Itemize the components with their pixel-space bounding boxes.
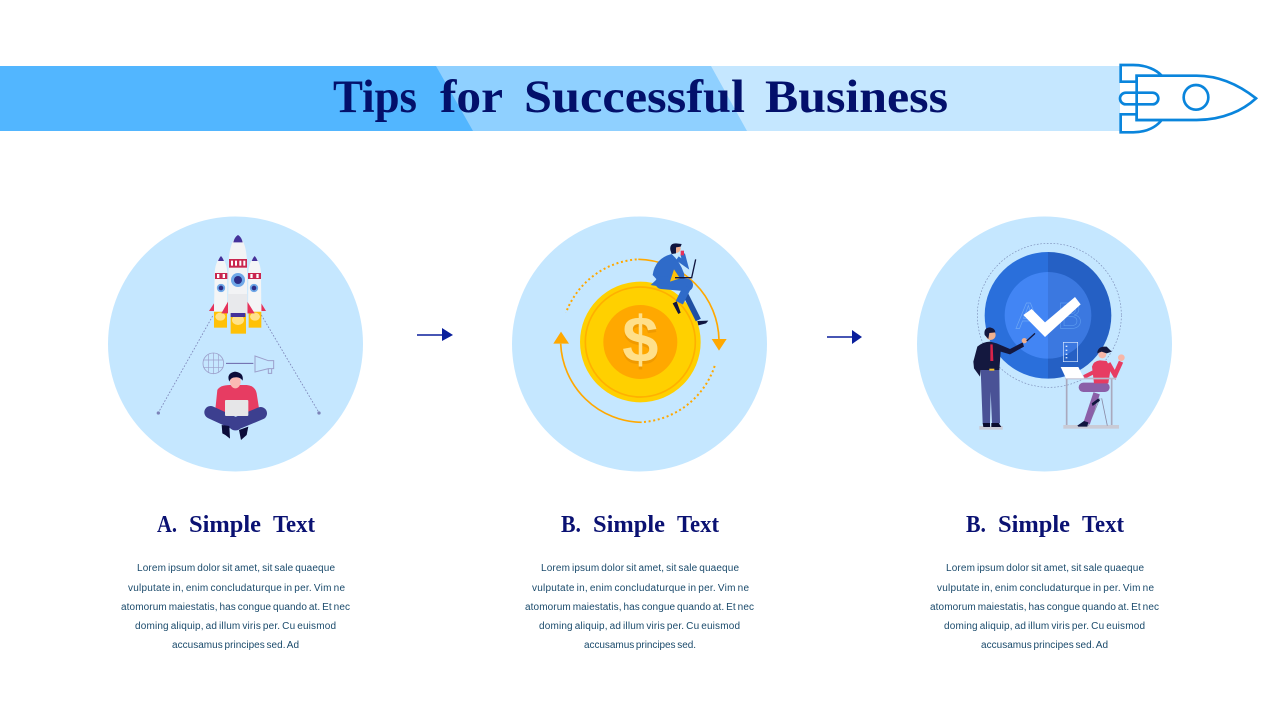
text block: atomorum maiestatis, has congue quando at. Et nec [525, 602, 754, 613]
circle background [108, 216, 363, 472]
heading: Text [1082, 512, 1124, 538]
heading [157, 512, 315, 538]
heading [966, 512, 1124, 538]
illustration: A/B check with two people: A [1016, 294, 1041, 336]
text block: Lorem ipsum dolor sit amet, sit sale quaeque [541, 563, 739, 574]
panel: A/B test [917, 216, 1172, 651]
text block: vulputate in, enim concludaturque in per. Vim ne [128, 583, 345, 594]
heading: Simple [593, 512, 665, 538]
icon: outline rocket [1120, 65, 1256, 132]
header banner [0, 66, 1120, 131]
text block: accusamus principes sed. Ad [981, 640, 1108, 651]
arrow [827, 330, 862, 344]
text block: accusamus principes sed. Ad [172, 640, 299, 651]
title [333, 71, 948, 123]
text block: Lorem ipsum dolor sit amet, sit sale quaeque [946, 563, 1144, 574]
heading: Simple [998, 512, 1070, 538]
text block: doming aliquip, ad illum viris per. Cu euismod [944, 621, 1145, 632]
heading: A. [157, 512, 177, 538]
title: Tips [333, 71, 417, 123]
text block: doming aliquip, ad illum viris per. Cu euismod [539, 621, 740, 632]
heading: B. [561, 512, 581, 538]
title: for [440, 71, 503, 123]
text block: Lorem ipsum dolor sit amet, sit sale quaeque [137, 563, 335, 574]
illustration: coin with cycle arrows and seated man: $ [622, 302, 658, 375]
illustration: coin with cycle arrows and seated man [553, 243, 727, 422]
text block: atomorum maiestatis, has congue quando at. Et nec [121, 602, 350, 613]
text block: accusamus principes sed. [584, 640, 696, 651]
text block [930, 563, 1159, 651]
text block [121, 563, 350, 651]
illustration: A/B check with two people: B [1058, 294, 1082, 336]
illustration: rockets and person with laptop [157, 235, 321, 440]
illustration: coin with cycle arrows and seated man: $ [622, 306, 658, 379]
circle background [512, 216, 767, 472]
panel: rocket launch [108, 216, 363, 651]
heading: B. [966, 512, 986, 538]
arrow [417, 328, 453, 341]
title: Business [765, 71, 948, 123]
text block: doming aliquip, ad illum viris per. Cu euismod [135, 621, 336, 632]
text block: vulputate in, enim concludaturque in per. Vim ne [937, 583, 1154, 594]
title: Successful [524, 71, 745, 123]
heading [561, 512, 719, 538]
text block: vulputate in, enim concludaturque in per. Vim ne [532, 583, 749, 594]
heading: Simple [189, 512, 261, 538]
panel: coin [512, 216, 767, 651]
text block [525, 563, 754, 651]
heading: Text [273, 512, 315, 538]
heading: Text [677, 512, 719, 538]
text block: atomorum maiestatis, has congue quando at. Et nec [930, 602, 1159, 613]
circle background [917, 216, 1172, 472]
illustration: A/B check with two people [973, 243, 1125, 430]
